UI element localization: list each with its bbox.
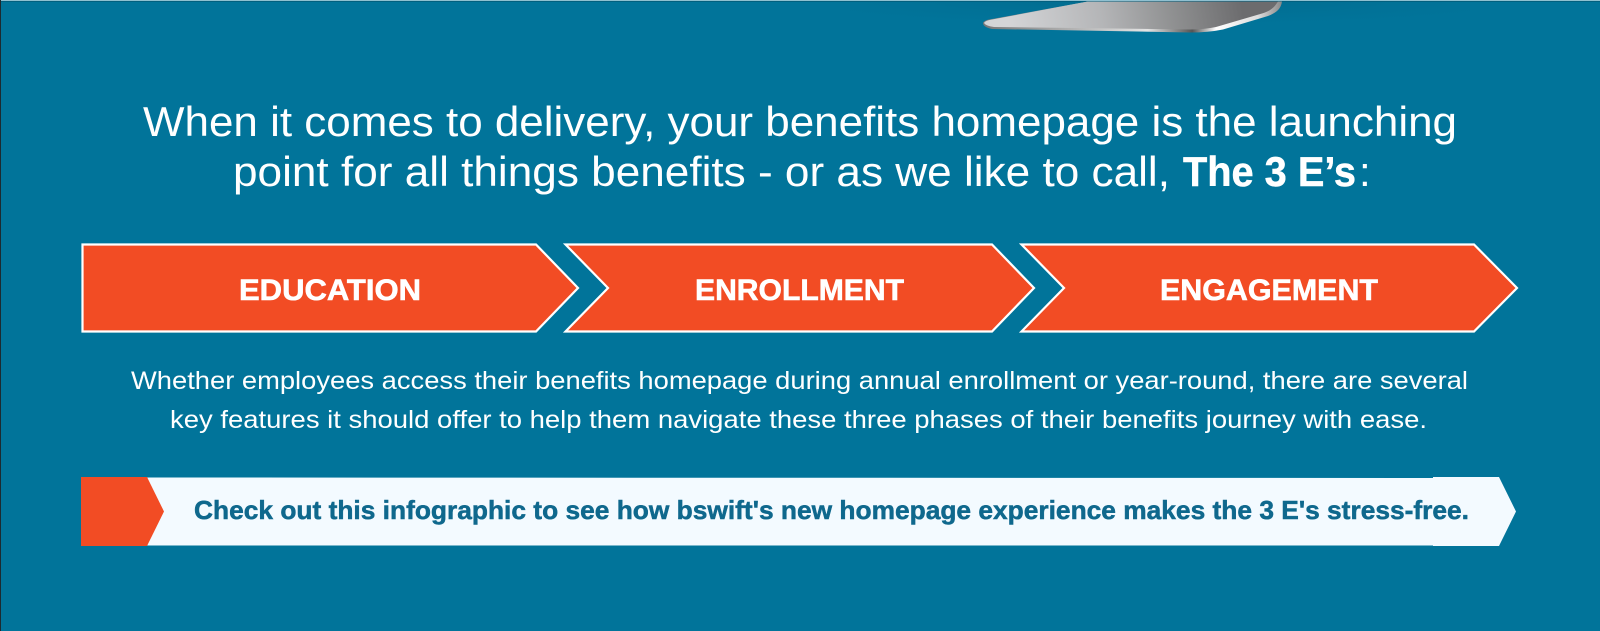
banner orange tab	[81, 477, 164, 546]
chevron: education	[82, 244, 578, 332]
chevron: enrollment	[566, 244, 1034, 332]
chevron: education: EDUCATION	[239, 274, 421, 307]
heading: :	[1359, 148, 1371, 195]
paragraph: Whether employees access their benefits homepage during annual enrollment or year-round, there are several	[131, 367, 1468, 395]
icon: monitor stand	[983, 2, 1282, 32]
chevron: enrollment: ENROLLMENT	[695, 274, 904, 307]
heading: point for all things benefits - or as we like to call,	[233, 148, 1170, 195]
heading	[143, 98, 1457, 195]
panel: three chevrons	[82, 244, 1517, 332]
chevron: engagement	[1022, 244, 1517, 332]
banner text: Check out this infographic to see how bswift's new homepage experience makes the 3 E's stress-free.	[194, 495, 1469, 525]
heading: The 3 E’s	[1183, 148, 1356, 195]
chevron: engagement: ENGAGEMENT	[1160, 274, 1378, 307]
callout banner	[81, 477, 1516, 546]
heading: When it comes to delivery, your benefits homepage is the launching	[143, 98, 1457, 145]
paragraph	[131, 367, 1468, 434]
paragraph: key features it should offer to help them navigate these three phases of their benefits journey with ease.	[170, 406, 1427, 434]
